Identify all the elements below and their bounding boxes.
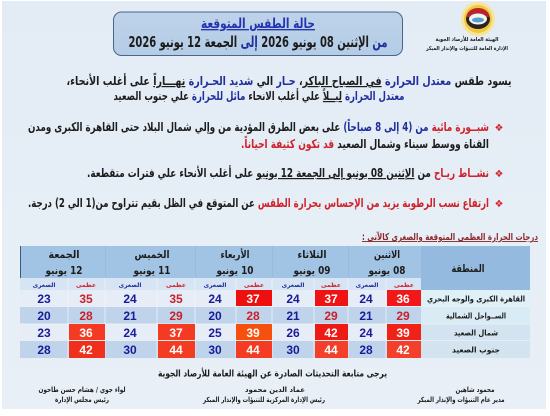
signature: central department head (202, 386, 325, 404)
temperature values: 23 (37, 292, 51, 306)
sub header row: الصغرى (356, 282, 378, 289)
signature: chairman: لواء جوي / هشام حسن طاحون (38, 386, 126, 394)
bullet icon: ❖ (495, 169, 504, 180)
signature: chairman (38, 386, 126, 404)
temperature values: 36 (79, 326, 93, 340)
temperature values: 30 (208, 343, 222, 357)
signature: central department head: عماد الدين محمود (245, 386, 305, 394)
temperature values: 28 (37, 343, 51, 357)
organisation name: الهيئة العامة للأرصاد الجوية (436, 35, 499, 43)
intro paragraph (66, 72, 512, 104)
signature: general manager: مدير عام التنبؤات والإنذار المبكر (417, 396, 504, 404)
sub header row: عظمى (166, 282, 186, 289)
sub header row: الصغرى (204, 282, 226, 289)
temperature values: 37 (324, 292, 338, 306)
table header: الاثنين (374, 249, 400, 261)
temperature values: 44 (169, 343, 183, 357)
temperature values: 29 (324, 309, 338, 323)
bullet: fog warning (28, 118, 504, 152)
table header: المنطقة (452, 263, 484, 275)
temperature values: 42 (324, 326, 338, 340)
temperature values: 26 (286, 326, 300, 340)
bullet icon: ❖ (495, 199, 504, 210)
table header: 08 يونيو (368, 265, 406, 277)
temperature values: 44 (246, 343, 260, 357)
table header: الخميس (134, 249, 170, 261)
temperature values: 20 (37, 309, 51, 323)
region names: جنوب الصعيد (452, 346, 500, 354)
region names (427, 294, 525, 354)
sub header row: عظمى (321, 282, 341, 289)
table header: 10 يونيو (216, 265, 254, 277)
sub header row: الصغرى (33, 282, 55, 289)
temperature values: 42 (396, 343, 410, 357)
temperature values: 29 (396, 309, 410, 323)
table header: الثلاثاء (298, 249, 326, 261)
signature: general manager (417, 386, 504, 404)
table header: 11 يونيو (133, 265, 170, 277)
intro paragraph: يسود طقس معتدل الحرارة في الصباح الباكر، حـار الي شديد الحـرارة نهـــاراً على أغلب الأنحاء، (66, 72, 512, 89)
temperature values: 30 (286, 343, 300, 357)
signature: chairman: رئيس مجلس الإدارة (55, 396, 109, 404)
signature: general manager: محمود شاهين (456, 386, 494, 394)
temperature values: 28 (359, 343, 373, 357)
temperature values: 37 (246, 292, 260, 306)
temperature values (37, 292, 410, 357)
table header: 12 يونيو (45, 265, 82, 277)
bullet: fog warning: شبــورة مائية من (4 إلى 8 صباحاً) على بعض الطرق المؤدية من وإلي شمال البلاد حتى القاهرة الكبرى ومدن (28, 118, 489, 135)
temperature values: 39 (246, 326, 260, 340)
temperature values: 35 (79, 292, 93, 306)
sub header row: عظمى (76, 282, 96, 289)
title: حالة الطقس المتوقعة (201, 16, 315, 32)
temperature values: 44 (324, 343, 338, 357)
temperature values: 39 (396, 326, 410, 340)
temperature values: 29 (169, 309, 183, 323)
row backgrounds (20, 290, 530, 358)
bullet: wind activity: نشــاط ريـاح من الإثنين 08 يونيو إلى الجمعة 12 يونيو على أغلب الأنحاء علي فترات متقطعة. (87, 165, 489, 181)
temperature values: 21 (286, 309, 300, 323)
temperature values: 24 (286, 292, 300, 306)
temperature values: 37 (169, 326, 183, 340)
temperature table (20, 246, 530, 358)
region names: القاهرة الكبرى والوجه البحري (427, 294, 525, 304)
temperature values: 23 (37, 326, 51, 340)
organisation name (425, 35, 508, 52)
follow-up note: يرجى متابعة التحديثات الصادرة عن الهيئة العامة للأرصاد الجوية (158, 368, 387, 380)
temperature values: 24 (123, 326, 137, 340)
temperature values: 28 (246, 309, 260, 323)
sub header row: الصغرى (119, 282, 141, 289)
table header (20, 246, 530, 290)
temperature values: 21 (359, 309, 373, 323)
bullet icon: ❖ (495, 123, 504, 134)
intro paragraph: معتدل الحرارة ليــلاً علي أغلب الانحاء مائل للحرارة علي جنوب الصعيد (113, 88, 404, 104)
temperature values: 35 (169, 292, 183, 306)
table header: الجمعة (48, 249, 80, 261)
temperature values: 42 (79, 343, 93, 357)
sub header row (20, 278, 421, 290)
organisation name: الإدارة العامة للتنبؤات والإنذار المبكر (425, 45, 508, 52)
date range: من الإثنين 08 يونيو 2026 إلى الجمعة 12 يونيو 2026 (128, 33, 387, 51)
temperature values: 25 (208, 326, 222, 340)
temperature values: 24 (359, 292, 373, 306)
temperature values: 24 (359, 326, 373, 340)
sub header row: عظمى (394, 282, 414, 289)
temperature values: 24 (123, 292, 137, 306)
sub header row: الصغرى (282, 282, 304, 289)
temperature values: 36 (396, 292, 410, 306)
temperature values: 30 (123, 343, 137, 357)
table header: 09 يونيو (293, 265, 330, 277)
region names: الســواحل الشمالية (446, 312, 506, 320)
table header: الأربعاء (220, 248, 250, 261)
hot cells (69, 290, 421, 358)
title box (114, 12, 402, 56)
logo (461, 2, 495, 36)
signature: central department head: رئيس الإدارة المركزية للتنبؤات والإنذار المبكر (202, 396, 325, 404)
temperature values: 21 (123, 309, 137, 323)
sub header row: عظمى (244, 282, 264, 289)
bullet: fog warning: القناة ووسط سيناء وشمال الصعيد قد تكون كثيفة احياناً. (241, 135, 489, 152)
temperature values: 20 (208, 309, 222, 323)
temperature values: 28 (79, 309, 93, 323)
temperature values: 24 (208, 292, 222, 306)
region names: شمال الصعيد (454, 328, 498, 338)
